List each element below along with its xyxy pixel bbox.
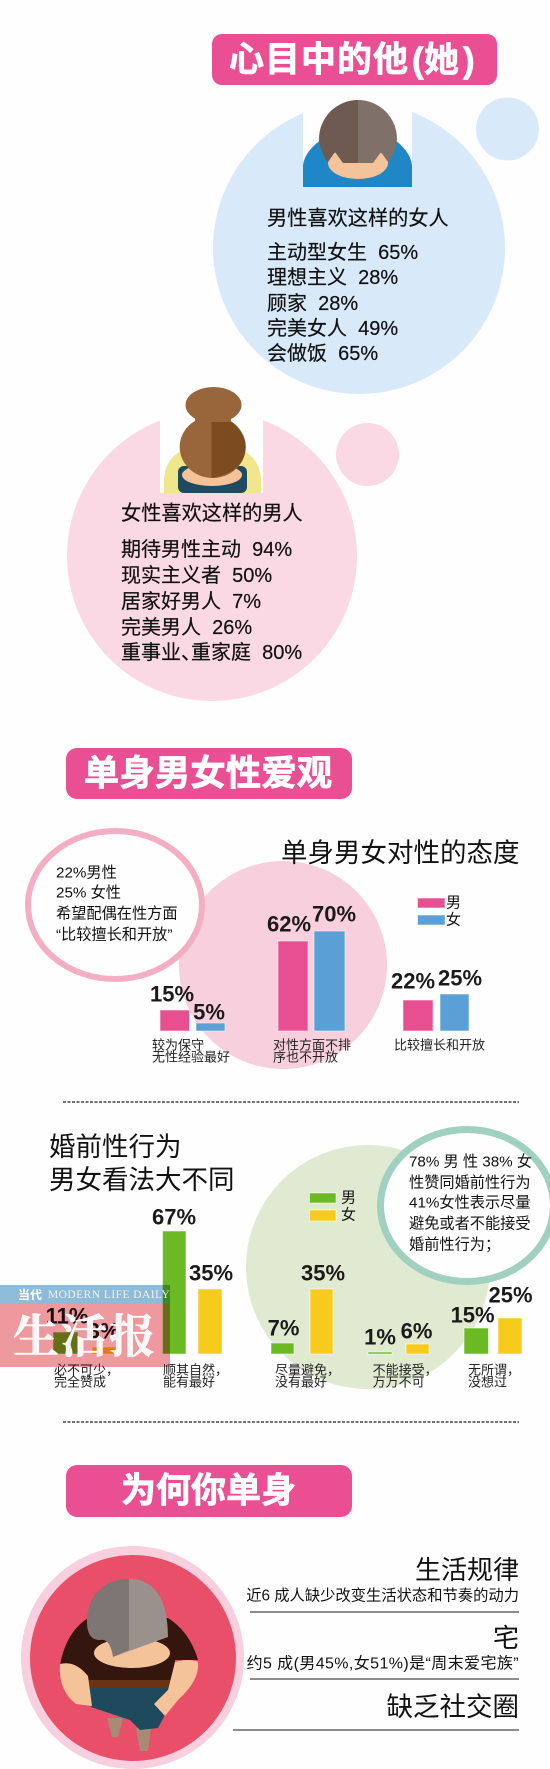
callout: 22% men 25% women: 25% 女性 bbox=[56, 884, 121, 902]
bars: let nature take its course: 35% bbox=[189, 1260, 233, 1286]
chart title: 婚前性行为 bbox=[49, 1132, 182, 1162]
chart title: 男女看法大不同 bbox=[49, 1165, 234, 1195]
text block: men's preferences: 顾家 28% bbox=[267, 292, 358, 315]
reason: stay at home: 约5 成(男45%,女51%)是“周末爱宅族” bbox=[247, 1654, 519, 1672]
text block: women's preferences: 居家好男人 7% bbox=[121, 590, 261, 613]
bars: essential: 必不可少， bbox=[54, 1362, 119, 1378]
section heading: 为何你单身: 为何你单身 bbox=[121, 1472, 296, 1510]
callout: 22% men 25% women: 希望配偶在性方面 bbox=[56, 906, 178, 922]
watermark: Modern Life Daily: 生活报 bbox=[13, 1312, 157, 1362]
legend bbox=[310, 1190, 356, 1224]
bars: essential: 完全赞成 bbox=[54, 1374, 106, 1390]
watermark: Modern Life Daily: MODERN LIFE DAILY bbox=[48, 1289, 170, 1301]
bars: avoid if possible bbox=[268, 1260, 345, 1390]
bars: indifferent: 没想过 bbox=[468, 1374, 507, 1390]
panel: attitudes to sex chart bbox=[28, 831, 520, 1069]
bars: conservative: 无性经验最好 bbox=[152, 1050, 230, 1064]
bars: let nature take its course bbox=[152, 1204, 233, 1390]
bars: conservative: 较为保守 bbox=[152, 1038, 204, 1052]
section heading: 为何你单身 bbox=[66, 1465, 352, 1517]
chart title: 单身男女对性的态度 bbox=[281, 838, 520, 868]
text block: men's preferences bbox=[267, 207, 449, 365]
text block: women's preferences: 现实主义者 50% bbox=[121, 564, 272, 587]
bars: unacceptable bbox=[364, 1318, 438, 1390]
bars: neither reject nor open: 62% bbox=[267, 912, 311, 936]
text block: women's preferences bbox=[121, 502, 303, 664]
callout: 78% men 38% women: 婚前性行为； bbox=[409, 1236, 500, 1254]
bars: avoid if possible: 7% bbox=[268, 1316, 299, 1340]
bars: conservative: 5% bbox=[193, 1000, 225, 1024]
icon: woman seen from above bbox=[164, 387, 261, 493]
bars: neither reject nor open: 70% bbox=[312, 902, 356, 926]
bars: neither reject nor open: 对性方面不排 bbox=[273, 1038, 351, 1052]
text block: women's preferences: 女性喜欢这样的男人 bbox=[121, 502, 303, 525]
legend: 女 bbox=[341, 1206, 356, 1224]
legend bbox=[418, 894, 461, 928]
text block: men's preferences: 男性喜欢这样的女人 bbox=[267, 207, 449, 230]
text block: men's preferences: 完美女人 49% bbox=[267, 317, 398, 340]
bars: unacceptable: 不能接受， bbox=[373, 1362, 438, 1378]
bars: avoid if possible: 35% bbox=[301, 1260, 345, 1286]
section heading: 心目中的他(她): 心目中的他 bbox=[229, 40, 409, 80]
bars: unacceptable: 6% bbox=[401, 1318, 432, 1344]
callout: 78% men 38% women bbox=[380, 1130, 550, 1282]
panel: what men like bbox=[213, 85, 539, 394]
bars: conservative: 15% bbox=[150, 982, 194, 1006]
bars: unacceptable: 1% bbox=[364, 1324, 396, 1350]
reason: stay at home: 宅 bbox=[493, 1623, 519, 1653]
bars: neither reject nor open bbox=[267, 902, 356, 1064]
legend: 男 bbox=[341, 1190, 356, 1206]
bars: neither reject nor open: 序也不开放 bbox=[273, 1050, 338, 1064]
bars: skilled and open: 25% bbox=[438, 966, 482, 990]
callout: 78% men 38% women: 性赞同婚前性行为 bbox=[409, 1174, 530, 1192]
section heading: 单身男女性爱观: 单身男女性爱观 bbox=[84, 753, 332, 793]
section heading: 单身男女性爱观 bbox=[66, 748, 352, 799]
reason: stay at home bbox=[247, 1623, 519, 1679]
bars: indifferent bbox=[451, 1282, 533, 1390]
icon: person standing in red circle bbox=[21, 1546, 244, 1769]
text block: women's preferences: 期待男性主动 94% bbox=[121, 538, 292, 561]
bars: essential: 3% bbox=[88, 1318, 119, 1344]
chart title bbox=[49, 1132, 234, 1195]
watermark: Modern Life Daily: 当代 bbox=[18, 1287, 42, 1302]
bars: essential: 11% bbox=[46, 1304, 88, 1328]
bars: indifferent: 无所谓， bbox=[468, 1362, 520, 1378]
reason: regular life bbox=[246, 1555, 519, 1612]
bars: essential bbox=[46, 1304, 119, 1390]
bars: avoid if possible: 尽量避免， bbox=[275, 1362, 340, 1378]
bars: indifferent: 25% bbox=[488, 1282, 533, 1308]
reason: regular life: 近6 成人缺少改变生活状态和节奏的动力 bbox=[246, 1588, 519, 1604]
callout: 22% men 25% women bbox=[28, 831, 202, 979]
legend: 男 bbox=[446, 894, 461, 912]
icon: man seen from above bbox=[303, 100, 412, 187]
callout: 78% men 38% women: 78% 男 性 38% 女 bbox=[409, 1152, 532, 1170]
reason: lack of social circle: 缺乏社交圈 bbox=[386, 1692, 519, 1722]
section heading: 心目中的他(她): ) bbox=[463, 40, 476, 80]
callout: 22% men 25% women: “比较擅长和开放” bbox=[56, 926, 172, 944]
bars: unacceptable: 万万不可 bbox=[373, 1374, 425, 1390]
bars: indifferent: 15% bbox=[451, 1302, 495, 1328]
bars: avoid if possible: 没有最好 bbox=[275, 1374, 327, 1390]
callout: 78% men 38% women: 41%女性表示尽量 bbox=[409, 1194, 531, 1212]
section heading: 心目中的他(她): ( bbox=[412, 40, 425, 80]
bars: let nature take its course: 能有最好 bbox=[163, 1374, 215, 1390]
bars: let nature take its course: 67% bbox=[152, 1204, 196, 1230]
bars: skilled and open: 比较擅长和开放 bbox=[394, 1038, 485, 1052]
watermark: Modern Life Daily bbox=[0, 1285, 170, 1367]
text block: men's preferences: 理想主义 28% bbox=[267, 266, 398, 289]
section heading: 心目中的他(她) bbox=[212, 34, 497, 85]
bars: conservative bbox=[150, 982, 230, 1064]
bars: skilled and open: 22% bbox=[391, 968, 435, 994]
section heading: 心目中的他(她): 她 bbox=[424, 40, 460, 80]
bars: skilled and open bbox=[391, 966, 485, 1052]
callout: 78% men 38% women: 避免或者不能接受 bbox=[409, 1216, 530, 1232]
text block: women's preferences: 重事业、重家庭 80% bbox=[121, 641, 302, 664]
reason: regular life: 生活规律 bbox=[415, 1555, 519, 1585]
panel: what women like bbox=[67, 387, 399, 701]
text block: men's preferences: 主动型女生 65% bbox=[267, 241, 418, 264]
legend: 女 bbox=[446, 910, 461, 928]
bars: let nature take its course: 顺其自然， bbox=[163, 1362, 228, 1378]
text block: reasons for being single bbox=[233, 1555, 519, 1730]
callout: 22% men 25% women: 22%男性 bbox=[56, 864, 117, 882]
text block: women's preferences: 完美男人 26% bbox=[121, 616, 252, 639]
text block: men's preferences: 会做饭 65% bbox=[267, 342, 378, 365]
panel: premarital sex chart bbox=[46, 1130, 550, 1390]
